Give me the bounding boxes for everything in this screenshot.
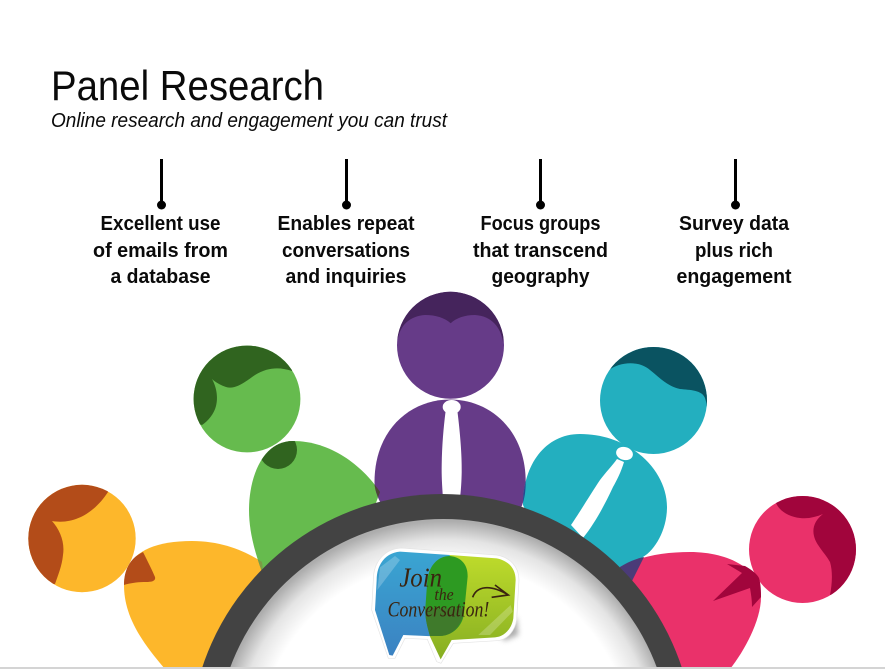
join the conversation badge bbox=[372, 548, 519, 663]
label 4 bbox=[676, 213, 792, 288]
label 2: conversations bbox=[282, 240, 410, 262]
bubble overlap bbox=[425, 556, 468, 636]
label 2: and inquiries bbox=[286, 266, 406, 288]
person: purple bbox=[374, 292, 526, 507]
label 2: Enables repeat bbox=[278, 213, 415, 235]
lime bubble bbox=[425, 555, 516, 659]
teal head bbox=[600, 347, 707, 454]
yellow body bbox=[124, 541, 275, 669]
label 4: Survey data bbox=[679, 213, 790, 235]
label 1: Excellent use bbox=[100, 213, 220, 235]
badge text: Join bbox=[399, 563, 442, 593]
label 2 bbox=[278, 213, 415, 288]
label 1: of emails from bbox=[93, 240, 228, 262]
overlap green yellow bbox=[258, 559, 263, 570]
teal tie bbox=[571, 445, 634, 538]
pink collar shade bbox=[713, 564, 761, 607]
badge white outline bbox=[372, 548, 519, 663]
person: teal bbox=[522, 347, 707, 568]
pink body bbox=[620, 552, 761, 669]
teal overlap purple bbox=[523, 480, 526, 502]
column: survey data bbox=[676, 159, 792, 288]
bottom edge bbox=[0, 667, 885, 669]
column: focus groups bbox=[473, 159, 608, 288]
pin marker 2 bbox=[342, 159, 351, 210]
white tie bbox=[442, 400, 462, 498]
label 4: engagement bbox=[676, 266, 792, 288]
person: yellow bbox=[28, 484, 262, 667]
person: green bbox=[194, 346, 378, 570]
column: database emails bbox=[93, 159, 228, 288]
label 1: a database bbox=[110, 266, 210, 288]
label 4: plus rich bbox=[695, 240, 773, 262]
pink overlap teal bbox=[618, 557, 644, 585]
badge shadow bbox=[500, 617, 518, 641]
column: repeat conversations bbox=[278, 159, 415, 288]
purple body bbox=[374, 400, 526, 510]
label 3: that transcend bbox=[473, 240, 608, 262]
pin marker 1 bbox=[157, 159, 166, 210]
person: pink bbox=[618, 490, 865, 669]
yellow head bbox=[28, 484, 136, 592]
label 3 bbox=[473, 213, 608, 288]
green body bbox=[249, 441, 380, 600]
badge arrow bbox=[473, 585, 508, 597]
central ring bbox=[202, 494, 682, 669]
badge text: Conversation! bbox=[388, 597, 489, 622]
purple head bbox=[397, 292, 504, 399]
badge text: the bbox=[434, 585, 454, 604]
title: Panel Research bbox=[51, 62, 324, 109]
gloss streaks bbox=[377, 556, 513, 635]
blue bubble bbox=[375, 552, 450, 656]
label 3: geography bbox=[492, 266, 590, 288]
label 3: Focus groups bbox=[480, 213, 600, 235]
green shoulder shade bbox=[262, 441, 297, 469]
pink head bbox=[749, 496, 856, 603]
purple overlap green bbox=[374, 484, 380, 498]
label 1 bbox=[93, 213, 228, 288]
pin marker 3 bbox=[536, 159, 545, 210]
teal body bbox=[523, 434, 667, 580]
pin marker 4 bbox=[731, 159, 740, 210]
yellow shoulder shade bbox=[124, 552, 155, 585]
badge text bbox=[388, 563, 489, 622]
subtitle: Online research and engagement you can trust bbox=[51, 109, 448, 132]
green head bbox=[194, 346, 300, 452]
